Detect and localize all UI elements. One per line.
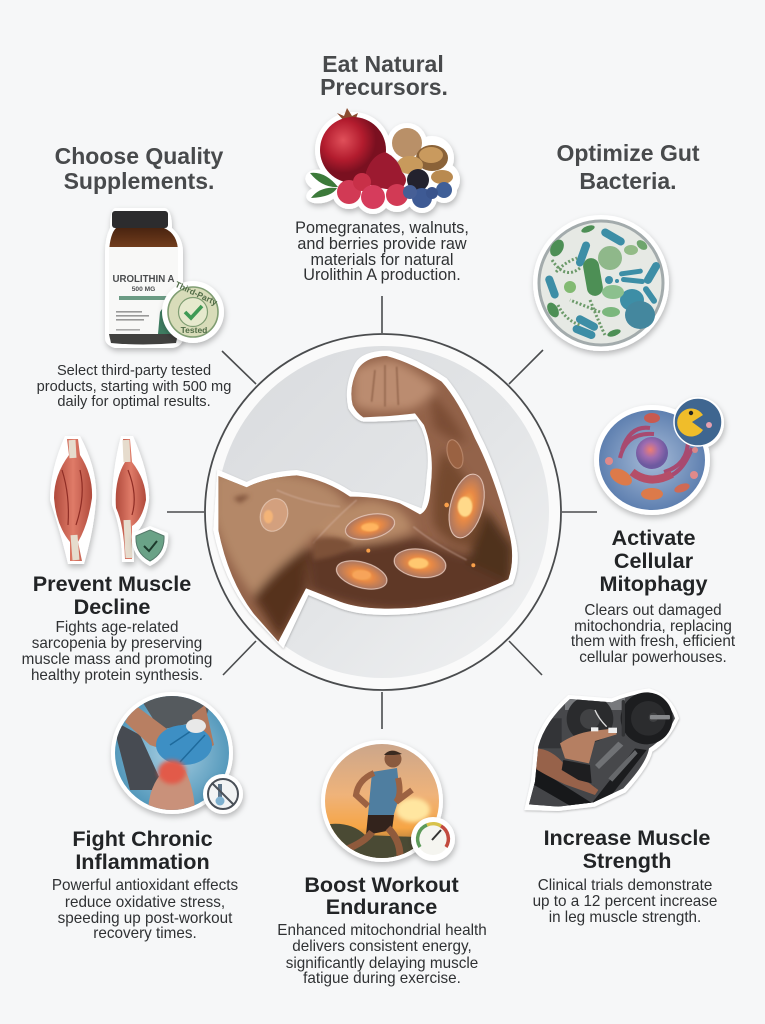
block: eat natural precursors (295, 51, 469, 284)
heading: Eat Natural (322, 51, 444, 77)
block: boost workout endurance (277, 740, 487, 987)
icon: supplement bottle with badge: 500 MG (132, 286, 155, 293)
badge: third-party tested: Tested (181, 325, 207, 335)
description: muscle mass and promoting (22, 651, 212, 668)
icon: supplement bottle with badge: UROLITHIN A (112, 274, 175, 285)
badge: no heat (203, 774, 243, 814)
description: Fights age-related (56, 619, 178, 636)
heading: Fight Chronic (72, 826, 213, 851)
grey disc (217, 346, 549, 678)
block: increase muscle strength (524, 688, 717, 926)
description: up to a 12 percent increase (533, 893, 717, 910)
description: Clinical trials demonstrate (538, 877, 712, 894)
badge: third-party tested: Third-Party (174, 279, 219, 308)
description: Powerful antioxidant effects (52, 877, 238, 894)
description: fatigue during exercise. (303, 970, 461, 987)
pacman bubble (674, 398, 722, 446)
description: products, starting with 500 mg (37, 379, 231, 395)
connector spokes (167, 296, 597, 729)
gauge badge (411, 817, 455, 861)
icon: leg press in gym (524, 688, 682, 812)
icon: petri dish of bacteria (533, 215, 669, 351)
description: Urolithin A production. (303, 266, 461, 284)
icon: fruits and nuts (303, 108, 460, 214)
icon: knee with ice pack (110, 690, 243, 815)
description: sarcopenia by preserving (32, 635, 202, 652)
description: delivers consistent energy, (292, 938, 472, 955)
heading: Endurance (326, 894, 437, 919)
icon: cell with pacman bubble (594, 397, 724, 515)
description: mitochondria, replacing (574, 618, 732, 635)
description: significantly delaying muscle (286, 955, 478, 972)
heading: Mitophagy (600, 571, 707, 596)
shield badge (132, 526, 168, 566)
description: Pomegranates, walnuts, (295, 219, 469, 237)
icon: runner at sunset with gauge (321, 740, 455, 862)
block: prevent muscle decline (22, 436, 212, 684)
description: Select third-party tested (57, 363, 211, 379)
heading: Cellular (614, 548, 694, 573)
heading: Supplements. (64, 168, 214, 194)
description: speeding up post-workout (58, 910, 233, 927)
block: activate cellular mitophagy (571, 397, 736, 666)
description: healthy protein synthesis. (31, 667, 203, 684)
heading: Boost Workout (304, 872, 459, 897)
heading: Prevent Muscle (33, 571, 191, 596)
heading: Increase Muscle (544, 825, 710, 850)
description: daily for optimal results. (57, 394, 211, 410)
heading: Inflammation (75, 849, 210, 874)
mitochondria (256, 438, 491, 594)
heading: Optimize Gut (556, 140, 700, 166)
block: optimize gut bacteria (533, 140, 700, 351)
heading: Strength (583, 848, 671, 873)
block: fight chronic inflammation (52, 690, 243, 942)
icon: muscles with shield (50, 436, 168, 566)
heading: Bacteria. (579, 168, 677, 194)
description: reduce oxidative stress, (65, 894, 225, 911)
ring (205, 334, 561, 690)
description: Enhanced mitochondrial health (277, 922, 487, 939)
description: in leg muscle strength. (549, 909, 701, 926)
block: choose quality supplements (37, 143, 231, 410)
description: cellular powerhouses. (579, 649, 727, 666)
heading: Decline (74, 594, 150, 619)
heading: Activate (611, 525, 696, 550)
central circle with muscular arm (205, 334, 561, 690)
description: materials for natural (310, 251, 454, 269)
description: and berries provide raw (297, 235, 467, 253)
heading: Precursors. (320, 74, 448, 100)
description: Clears out damaged (584, 602, 722, 619)
badge: third-party tested (162, 279, 224, 343)
heading: Choose Quality (55, 143, 223, 169)
arm illustration (210, 350, 527, 650)
icon: supplement bottle with badge (105, 208, 224, 348)
description: them with fresh, efficient (571, 633, 736, 650)
description: recovery times. (93, 925, 197, 942)
